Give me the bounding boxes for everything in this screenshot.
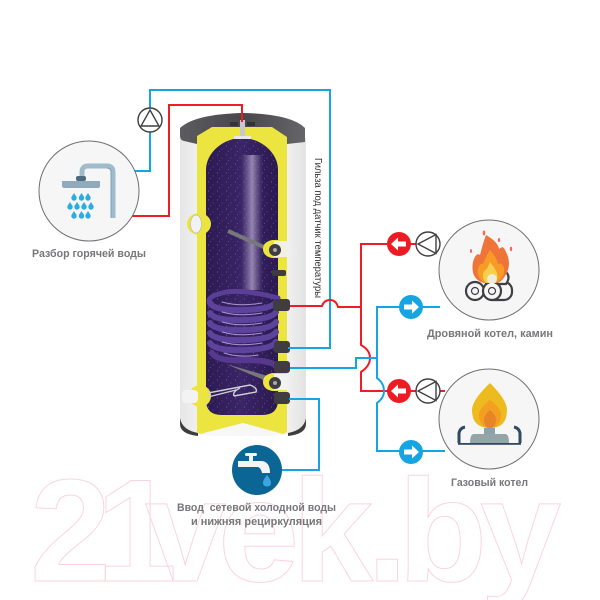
- tank body: [180, 138, 306, 436]
- label: wood boiler: Дровяной котел, камин: [427, 328, 553, 340]
- label: cold water input: и нижняя рециркуляция: [191, 516, 322, 528]
- icon: flame: [470, 230, 512, 284]
- hot water outlet pipe red: [132, 105, 242, 216]
- label: cold water input: [177, 502, 336, 528]
- pump: hot water: [138, 108, 162, 132]
- connection ports: [273, 299, 290, 404]
- electric heater element: [182, 385, 256, 407]
- label: gas boiler: Газовый котел: [451, 477, 528, 489]
- circle: gas boiler: [439, 369, 539, 469]
- blue arrow badge: gas boiler: [399, 440, 423, 464]
- purple inner cavity: [206, 138, 278, 415]
- cold water inlet pipe: [270, 399, 319, 470]
- tank lid: [180, 113, 305, 144]
- yellow insulation: [197, 127, 287, 434]
- upper anode: [228, 231, 287, 258]
- water heater tank: [180, 113, 306, 436]
- central light column: [241, 155, 263, 290]
- cold return pipe blue: [135, 90, 330, 348]
- circle: wood boiler: [439, 220, 539, 320]
- vertical label: sensor sleeve: Гильза под датчик температуры: [312, 158, 323, 298]
- label: shower: Разбор горячей воды: [32, 248, 146, 260]
- boiler red supply pipes: [290, 244, 440, 391]
- blue arrow badge: wood boiler: [399, 295, 423, 319]
- bottom dark band: [180, 418, 306, 436]
- pump: wood boiler: [416, 232, 440, 256]
- thermometer port: [187, 213, 211, 235]
- icon: logs: [466, 272, 512, 300]
- spiral coil: [209, 291, 278, 366]
- label: cold water input: Ввод сетевой холодной воды: [177, 502, 336, 514]
- upper port: [272, 270, 286, 276]
- icon: gas burner: [458, 383, 521, 445]
- top fitting: [230, 120, 255, 139]
- lower gas red pipe: [399, 390, 445, 392]
- red arrow badge: wood boiler: [387, 232, 411, 256]
- circle: cold water tap: [232, 445, 282, 495]
- circle: shower outlet: [39, 141, 139, 241]
- pump: gas boiler: [416, 379, 440, 403]
- icon: shower: [62, 166, 113, 219]
- red arrow badge: gas boiler: [387, 379, 411, 403]
- boiler blue pipes: [290, 307, 445, 451]
- icon: tap: [238, 453, 271, 486]
- lower anode: [226, 364, 287, 391]
